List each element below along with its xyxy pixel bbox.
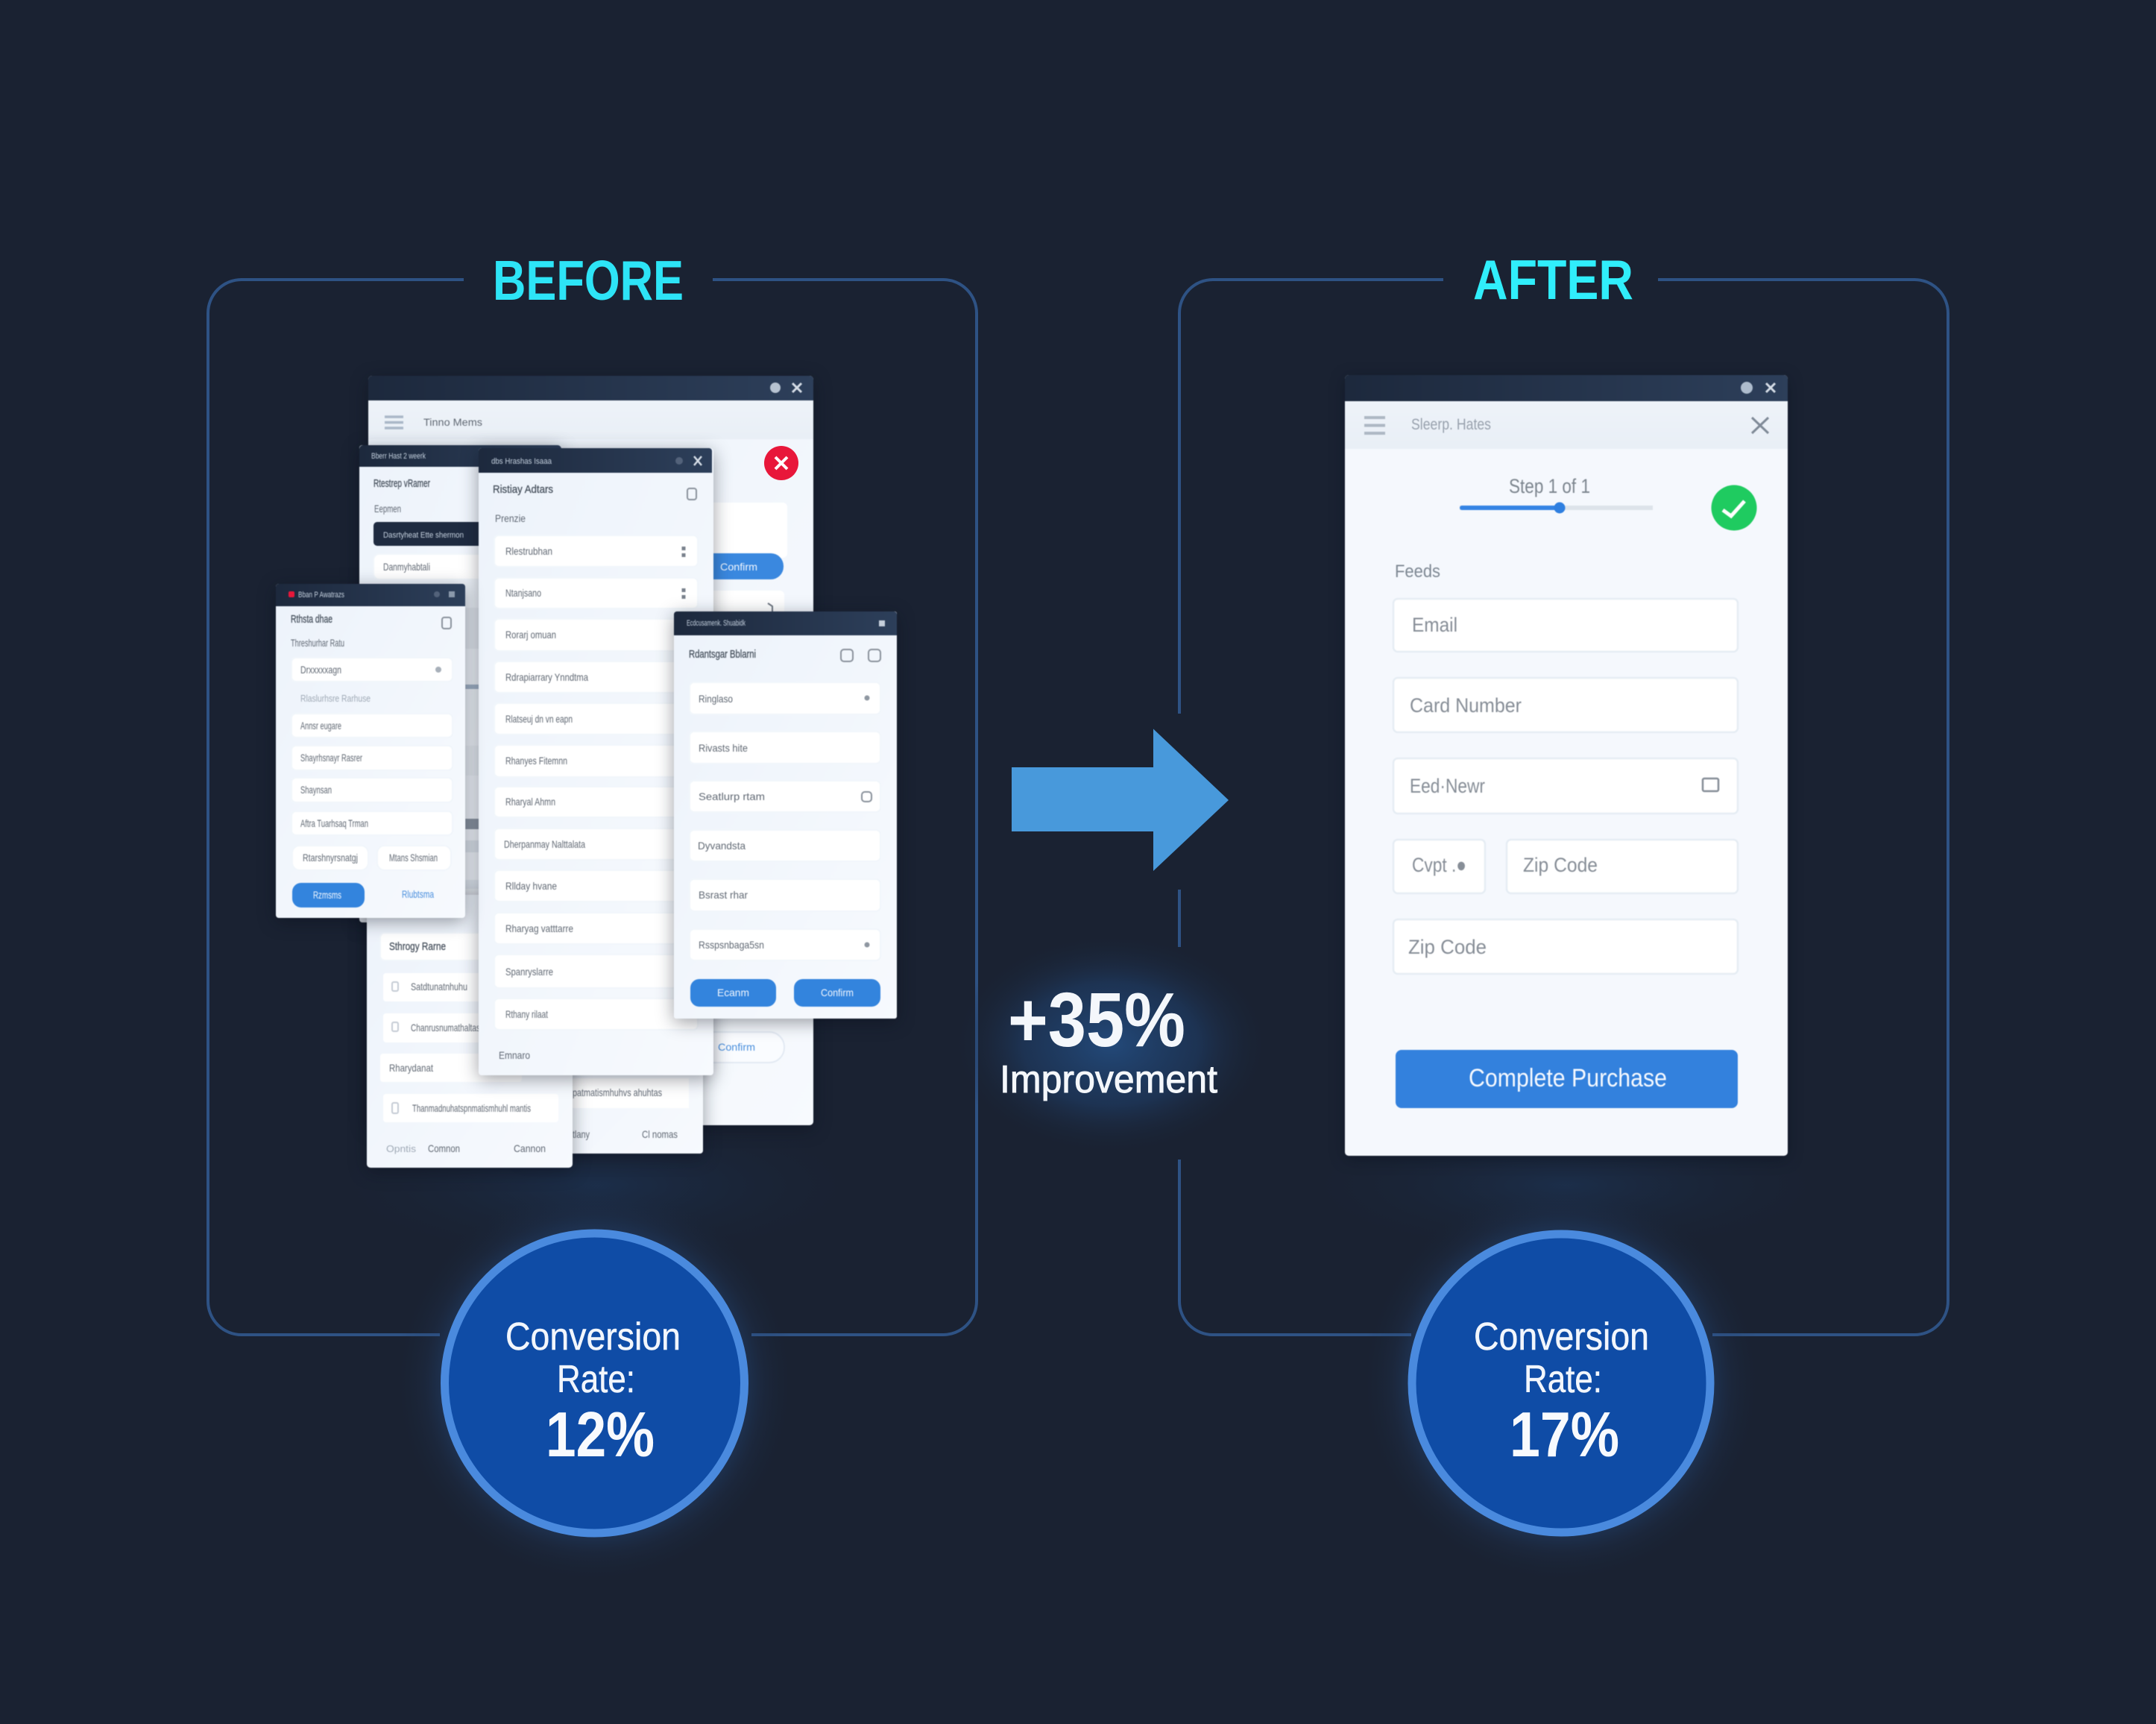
badge label: Conversion [1474,1315,1649,1359]
window: right front: Seatlurp rtam [699,790,765,802]
window: upper left: Eepmen [374,503,401,515]
window: left front: Annsr eugare [300,720,341,732]
window: left front: Threshurhar Ratu [291,637,344,649]
window: lower left: Cannon [514,1142,546,1154]
progress slider [1460,503,1653,513]
window: left front [276,584,465,918]
window: tall center form: Ristiay Adtars [493,483,553,496]
window title: Sleerp. Hates [1411,416,1491,433]
window: left front: Rzmsms [313,889,341,901]
window: left front: Shaynsan [300,784,332,796]
field: email: Email [1412,614,1457,636]
window: lower back: patmatismhuhvs ahuhtas [573,1086,662,1098]
window: back main: Tinno Mems [423,416,482,428]
window: right front: Rdantsgar Bblarni [689,648,756,661]
window: lower back: tlany [573,1128,590,1140]
window: lower back: Cl nomas [642,1128,678,1140]
field: card number [1393,678,1738,732]
window: lower left: Opntis [386,1143,417,1154]
window: lower left: Rharydanat [389,1062,433,1074]
badge label: Conversion [505,1315,681,1359]
field: card number: Card Number [1410,694,1522,717]
improvement value: +35% [1008,977,1185,1063]
badge label second line: Rate: [557,1358,635,1401]
window: lower left: Sthrogy Rarne [389,940,446,953]
window: lower left: Thanmadnuhatspnmatismhuhl mantis [412,1102,531,1114]
title bar [1345,375,1788,401]
window: tall center form: Rthany rilaat [505,1008,548,1020]
step label: Step 1 of 1 [1509,475,1590,497]
field: zip code [1507,840,1738,893]
window: tall center form [479,448,713,1075]
window: right front: Rivasts hite [699,742,748,754]
improvement label: Improvement [1000,1058,1218,1101]
window: lower left: Satdtunatnhuhu [411,981,467,992]
after: single-step checkout window [1345,375,1788,1156]
window: tall center form: Rdrapiarrary Ynndtma [505,671,588,683]
window: left front: Mtans Shsmian [389,852,438,863]
window: right front: Ecdcusamenk. Shuabidk [687,619,746,628]
window: right front: Ecanm [717,987,749,998]
heading: AFTER: AFTER [1473,248,1633,311]
field: expiry: Eed·Newr [1410,775,1485,797]
badge: before conversion rate [394,1182,796,1585]
window: left front: Rtarshnyrsnatgj [303,852,358,863]
badge: after conversion rate [1360,1182,1762,1585]
field: zip code: Zip Code [1523,854,1598,876]
window: left front: Bban P Awatrazs [298,591,344,600]
button: complete purchase [1396,1050,1738,1108]
window: tall center form: Rorarj omuan [505,629,556,641]
window: right front: Bsrast rhar [699,889,748,901]
window: right front: Rsspsnbaga5sn [699,939,764,951]
window: right front [674,611,897,1019]
panel frame: before [208,280,977,1335]
window: lower left: Comnon [428,1142,460,1154]
window: lower left [367,895,573,1168]
icon: close [1752,418,1768,433]
window: left front: Rlaslurhsre Rarhuse [300,693,371,704]
window: left front: Drxxxxxagn [300,664,341,676]
heading: BEFORE: BEFORE [493,249,684,312]
before: stack of cluttered form windows [276,376,897,1168]
window: upper left [359,445,561,922]
button: complete purchase: Complete Purchase [1469,1064,1667,1092]
window: right front: Dyvandsta [698,840,746,852]
window: tall center form: Rharyal Ahmn [505,796,555,808]
badge value: 12% [546,1400,655,1470]
window: back main: Confirm [718,1041,755,1053]
icon: hamburger menu [1364,418,1385,433]
window: tall center form: Rharyag vatttarre [505,922,573,934]
window: tall center form: Rllday hvane [505,880,557,892]
icon: green check badge [1712,485,1756,531]
window: upper left: Dasrtyheat Ette shermon [383,531,464,540]
field: cvv [1393,840,1485,893]
window: lower left: Chanrusnumathaltas [411,1022,480,1034]
window: back main [368,376,813,1125]
window: tall center form: Dherpanmay Nalttalata [504,838,585,850]
window: tall center form: Prenzie [495,512,526,524]
field: zip code second [1393,919,1738,974]
window: upper left: Bberr Hast 2 weerk [371,452,426,461]
window: upper left: Rtestrep vRamer [373,477,430,490]
panel frame: after [1179,280,1948,1335]
window: right front: Confirm [821,987,854,998]
window: tall center form: Rlatseuj dn vn eapn [505,713,573,725]
badge label second line: Rate: [1524,1358,1602,1401]
window: back main: Confirm [720,561,757,573]
window: left front: Shayrhsnayr Rasrer [300,752,362,764]
window: left front: Rlubtsma [402,888,434,900]
window: tall center form: Spanryslarre [505,966,553,978]
window: tall center form: Emnaro [499,1049,530,1061]
window: lower back [522,969,703,1154]
window: right front: Ringlaso [699,693,733,705]
badge value: 17% [1510,1400,1619,1470]
field: cvv: Cvpt .● [1412,854,1466,876]
window: left front: Rthsta dhae [291,613,332,626]
window: tall center form: dbs Hrashas Isaaa [491,457,552,466]
field: expiry [1393,758,1738,814]
window: upper left: Danmyhabtali [383,561,430,573]
arrow [1012,729,1229,871]
window: tall center form: Rhanyes Fitemnn [505,755,567,767]
window: tall center form: Rlestrubhan [505,545,552,557]
field: zip code second: Zip Code [1408,936,1487,958]
improvement callout [951,932,1271,1156]
window: tall center form: Ntanjsano [505,587,541,599]
field: email [1393,599,1738,652]
window: left front: Aftra Tuarhsaq Trman [300,817,368,829]
section label: Feeds [1395,561,1440,582]
icon: red error badge [764,446,798,480]
